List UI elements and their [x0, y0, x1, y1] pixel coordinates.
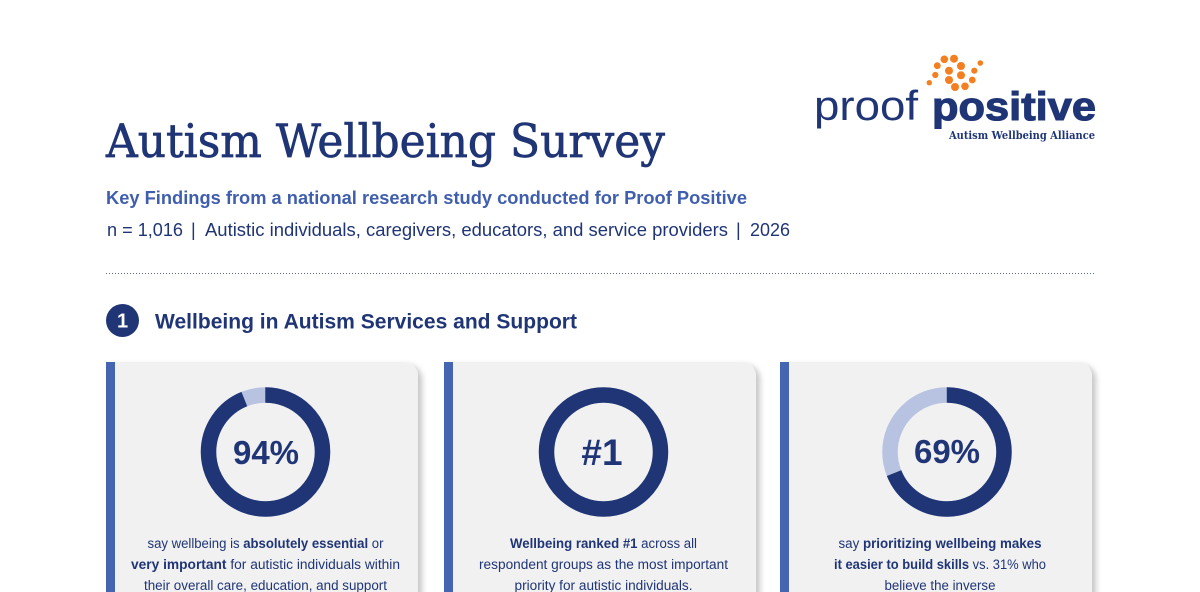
study details: | — [736, 220, 741, 240]
logo wordmark: positive: positive — [932, 85, 1096, 129]
panel text — [479, 536, 728, 592]
panel text: say prioritizing wellbeing makes — [838, 536, 1042, 551]
panel text: respondent groups as the most important — [479, 557, 728, 572]
study details: n = 1,016 — [107, 220, 183, 240]
panel: #1 — [444, 362, 756, 592]
donut chart: #1: #1 — [581, 432, 623, 473]
donut chart: 69% — [890, 395, 1004, 509]
donut chart: 94% — [208, 395, 322, 509]
panel: 69% — [780, 362, 1092, 592]
section title: Wellbeing in Autism Services and Support — [155, 310, 577, 334]
panel text — [834, 536, 1046, 592]
logo tagline: Autism Wellbeing Alliance — [948, 128, 1095, 142]
panel text: it easier to build skills vs. 31% who — [834, 557, 1046, 572]
panel text: very important for autistic individuals within — [131, 557, 400, 572]
section number badge: 1 — [117, 310, 128, 332]
panel text: Wellbeing ranked #1 across all — [510, 536, 697, 551]
logo: proof positive — [814, 55, 1096, 142]
study details: Autistic individuals, caregivers, educators, and service providers — [205, 220, 728, 240]
study details: 2026 — [750, 220, 790, 240]
subtitle: Key Findings from a national research study conducted for Proof Positive — [106, 188, 747, 208]
donut chart: #1 — [546, 395, 660, 509]
panel text — [131, 536, 400, 592]
section heading: 1 Wellbeing in Autism Services and Support — [106, 304, 577, 337]
title: Autism Wellbeing Survey — [105, 114, 665, 168]
panel text: say wellbeing is absolutely essential or — [148, 536, 384, 551]
icon: orange dot cluster — [927, 55, 983, 91]
donut chart: 69%: 69% — [914, 433, 980, 470]
panel: 94% — [106, 362, 418, 592]
logo wordmark: proof: proof — [814, 82, 918, 129]
donut chart: 94%: 94% — [233, 434, 299, 471]
study details: | — [191, 220, 196, 240]
section number badge — [106, 304, 139, 337]
